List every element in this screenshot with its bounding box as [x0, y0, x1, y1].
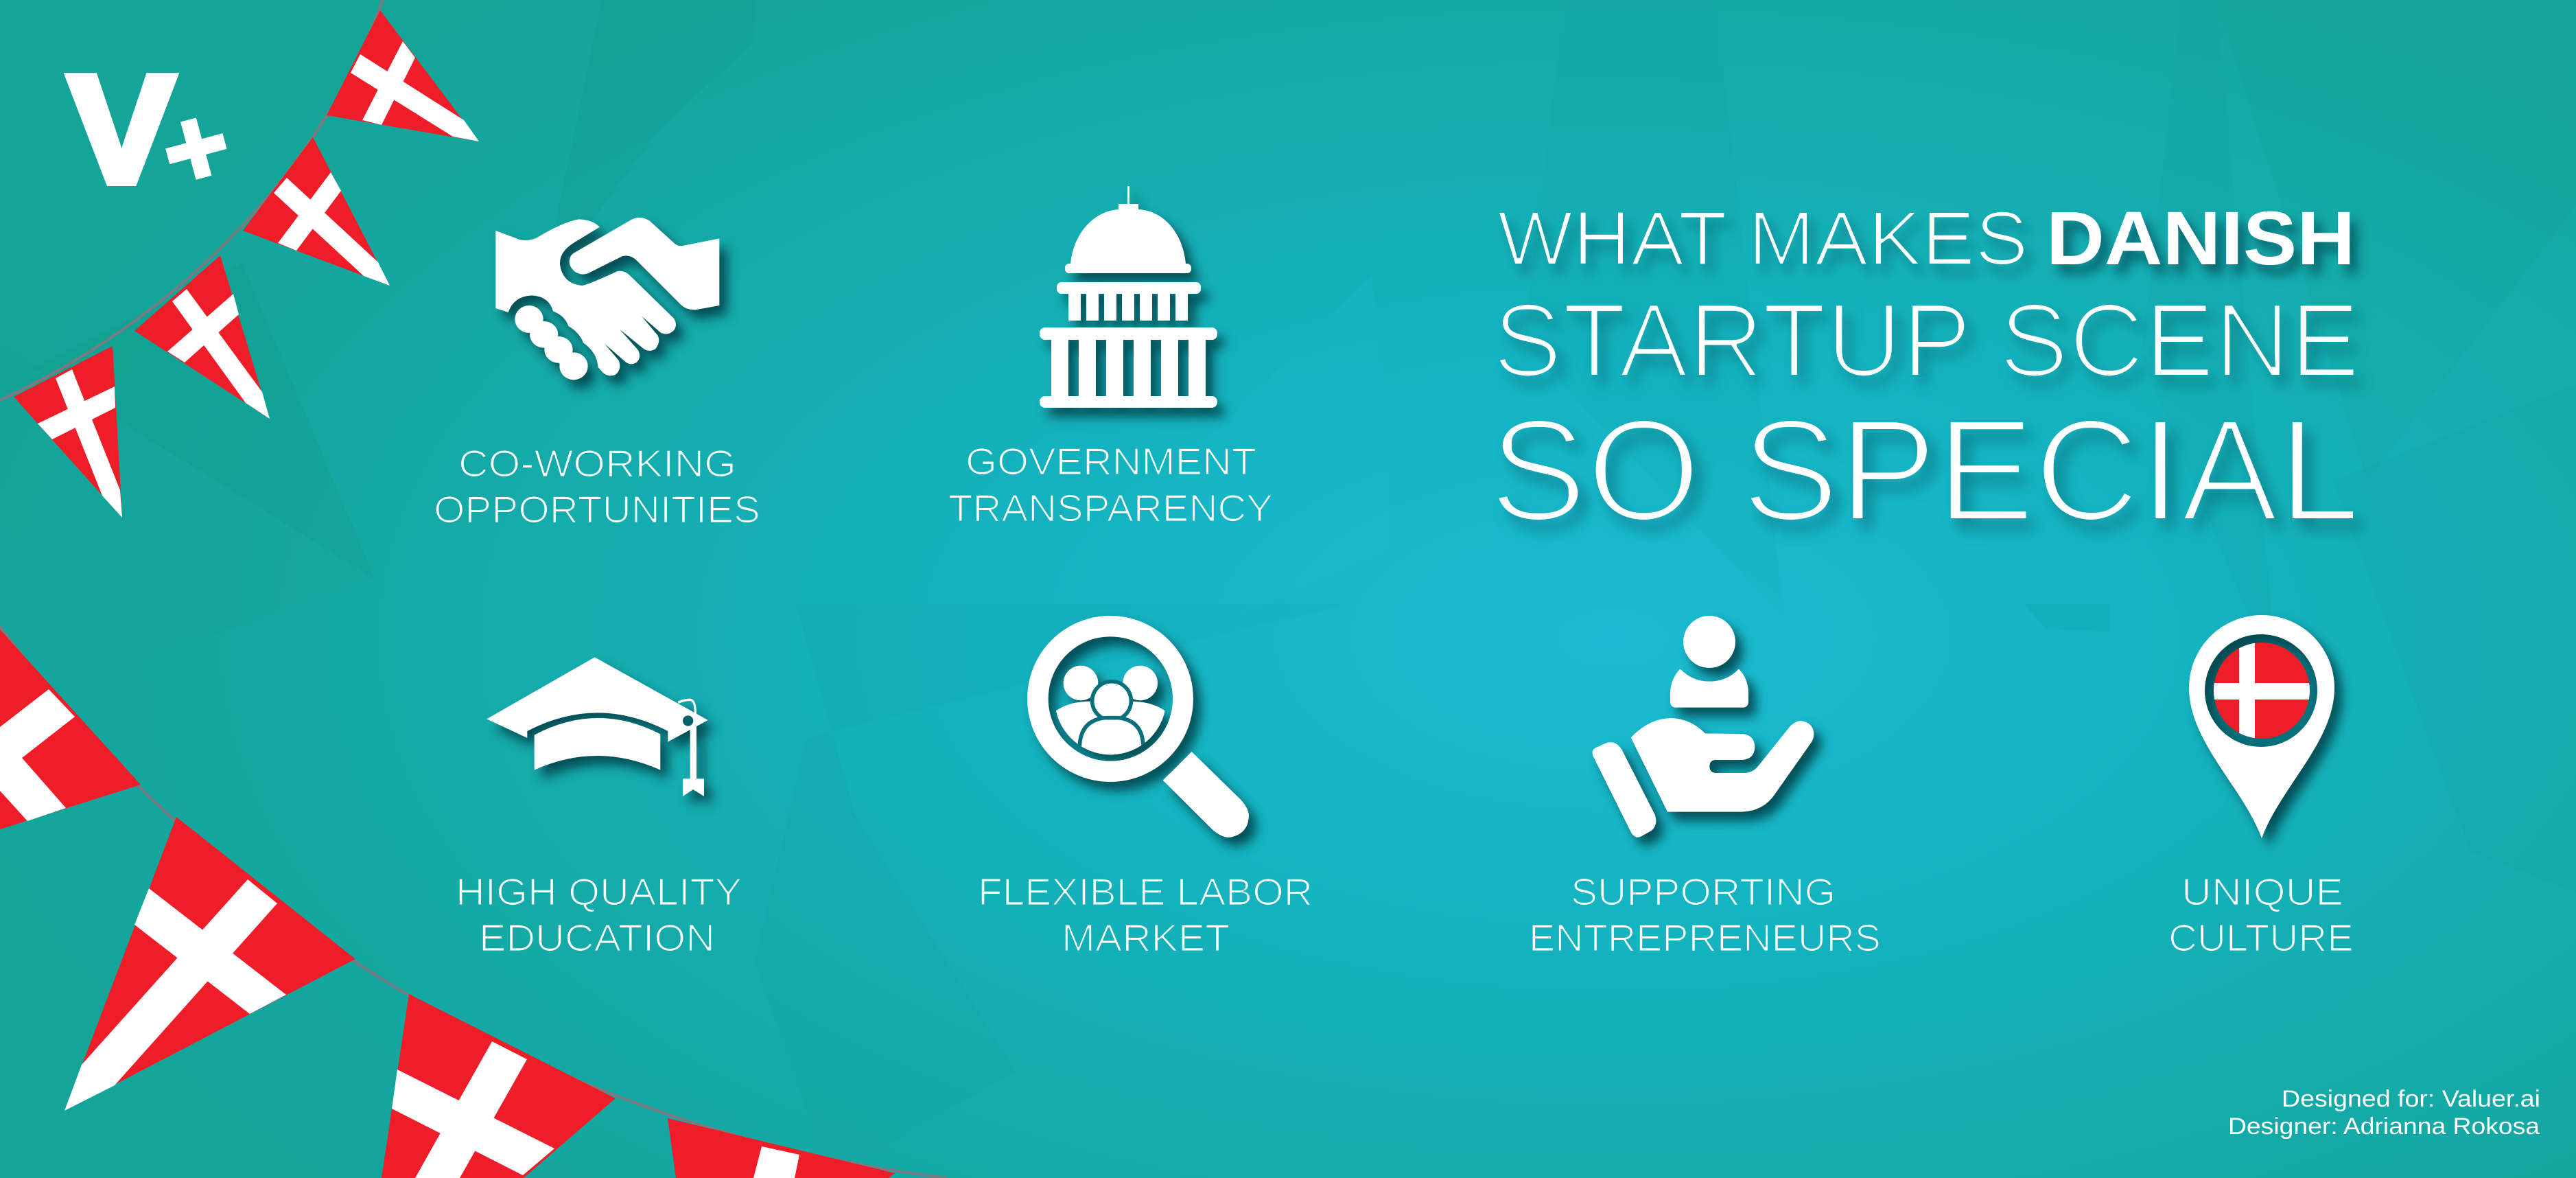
label: co-working opportunities [434, 442, 760, 531]
label: co-working opportunities: OPPORTUNITIES [434, 488, 760, 531]
label: flexible labor market [978, 870, 1313, 959]
icon: magnifier with people [1027, 616, 1249, 838]
icon: handshake [495, 218, 719, 380]
flag pennant 2 [243, 137, 390, 286]
label: high quality education [456, 870, 742, 959]
logo: V+: V [69, 45, 174, 215]
flag pennant 1 [327, 10, 479, 141]
label: high quality education: EDUCATION [479, 916, 715, 959]
credits: Designer: Adrianna Rokosa [2228, 1113, 2540, 1140]
label: supporting entrepreneurs: ENTREPRENEURS [1529, 916, 1881, 959]
logo: V+: + [149, 80, 242, 215]
icon: graduation cap [487, 657, 708, 796]
label: government transparency: GOVERNMENT [965, 440, 1256, 483]
label: unique culture: UNIQUE [2181, 870, 2343, 913]
title [1489, 196, 2360, 551]
label: flexible labor market: MARKET [1062, 916, 1230, 959]
label: unique culture [2168, 870, 2354, 959]
logo: V+ [69, 45, 242, 215]
title: WHAT MAKES [1497, 196, 2028, 281]
icon: government building [1040, 186, 1217, 408]
flag pennant 7 [382, 994, 616, 1178]
label: unique culture: CULTURE [2168, 916, 2354, 959]
label: government transparency [948, 440, 1273, 529]
label: government transparency: TRANSPARENCY [948, 487, 1273, 529]
label: supporting entrepreneurs [1529, 870, 1881, 959]
icon: map pin with Danish flag [2189, 615, 2334, 838]
bunting: top garland [0, 0, 479, 518]
credits: Designed for: Valuer.ai [2282, 1086, 2540, 1112]
flag pennant 4 [14, 346, 122, 518]
label: co-working opportunities: CO-WORKING [458, 442, 736, 485]
title: DANISH [2046, 196, 2355, 281]
flag pennant 5 [0, 630, 141, 829]
flag pennant 6 [65, 817, 355, 1111]
label: supporting entrepreneurs: SUPPORTING [1571, 870, 1836, 913]
flag pennant 3 [134, 255, 270, 419]
label: flexible labor market: FLEXIBLE LABOR [978, 870, 1313, 913]
bunting: bottom garland [0, 625, 947, 1178]
credits [2228, 1086, 2540, 1140]
icon: hand supporting person [1593, 616, 1814, 838]
flag pennant 8 [668, 1118, 895, 1178]
flag badge [2214, 643, 2310, 739]
title: SO SPECIAL [1489, 389, 2360, 551]
people group [1052, 666, 1169, 771]
title: STARTUP SCENE [1492, 282, 2360, 399]
label: high quality education: HIGH QUALITY [456, 870, 742, 913]
